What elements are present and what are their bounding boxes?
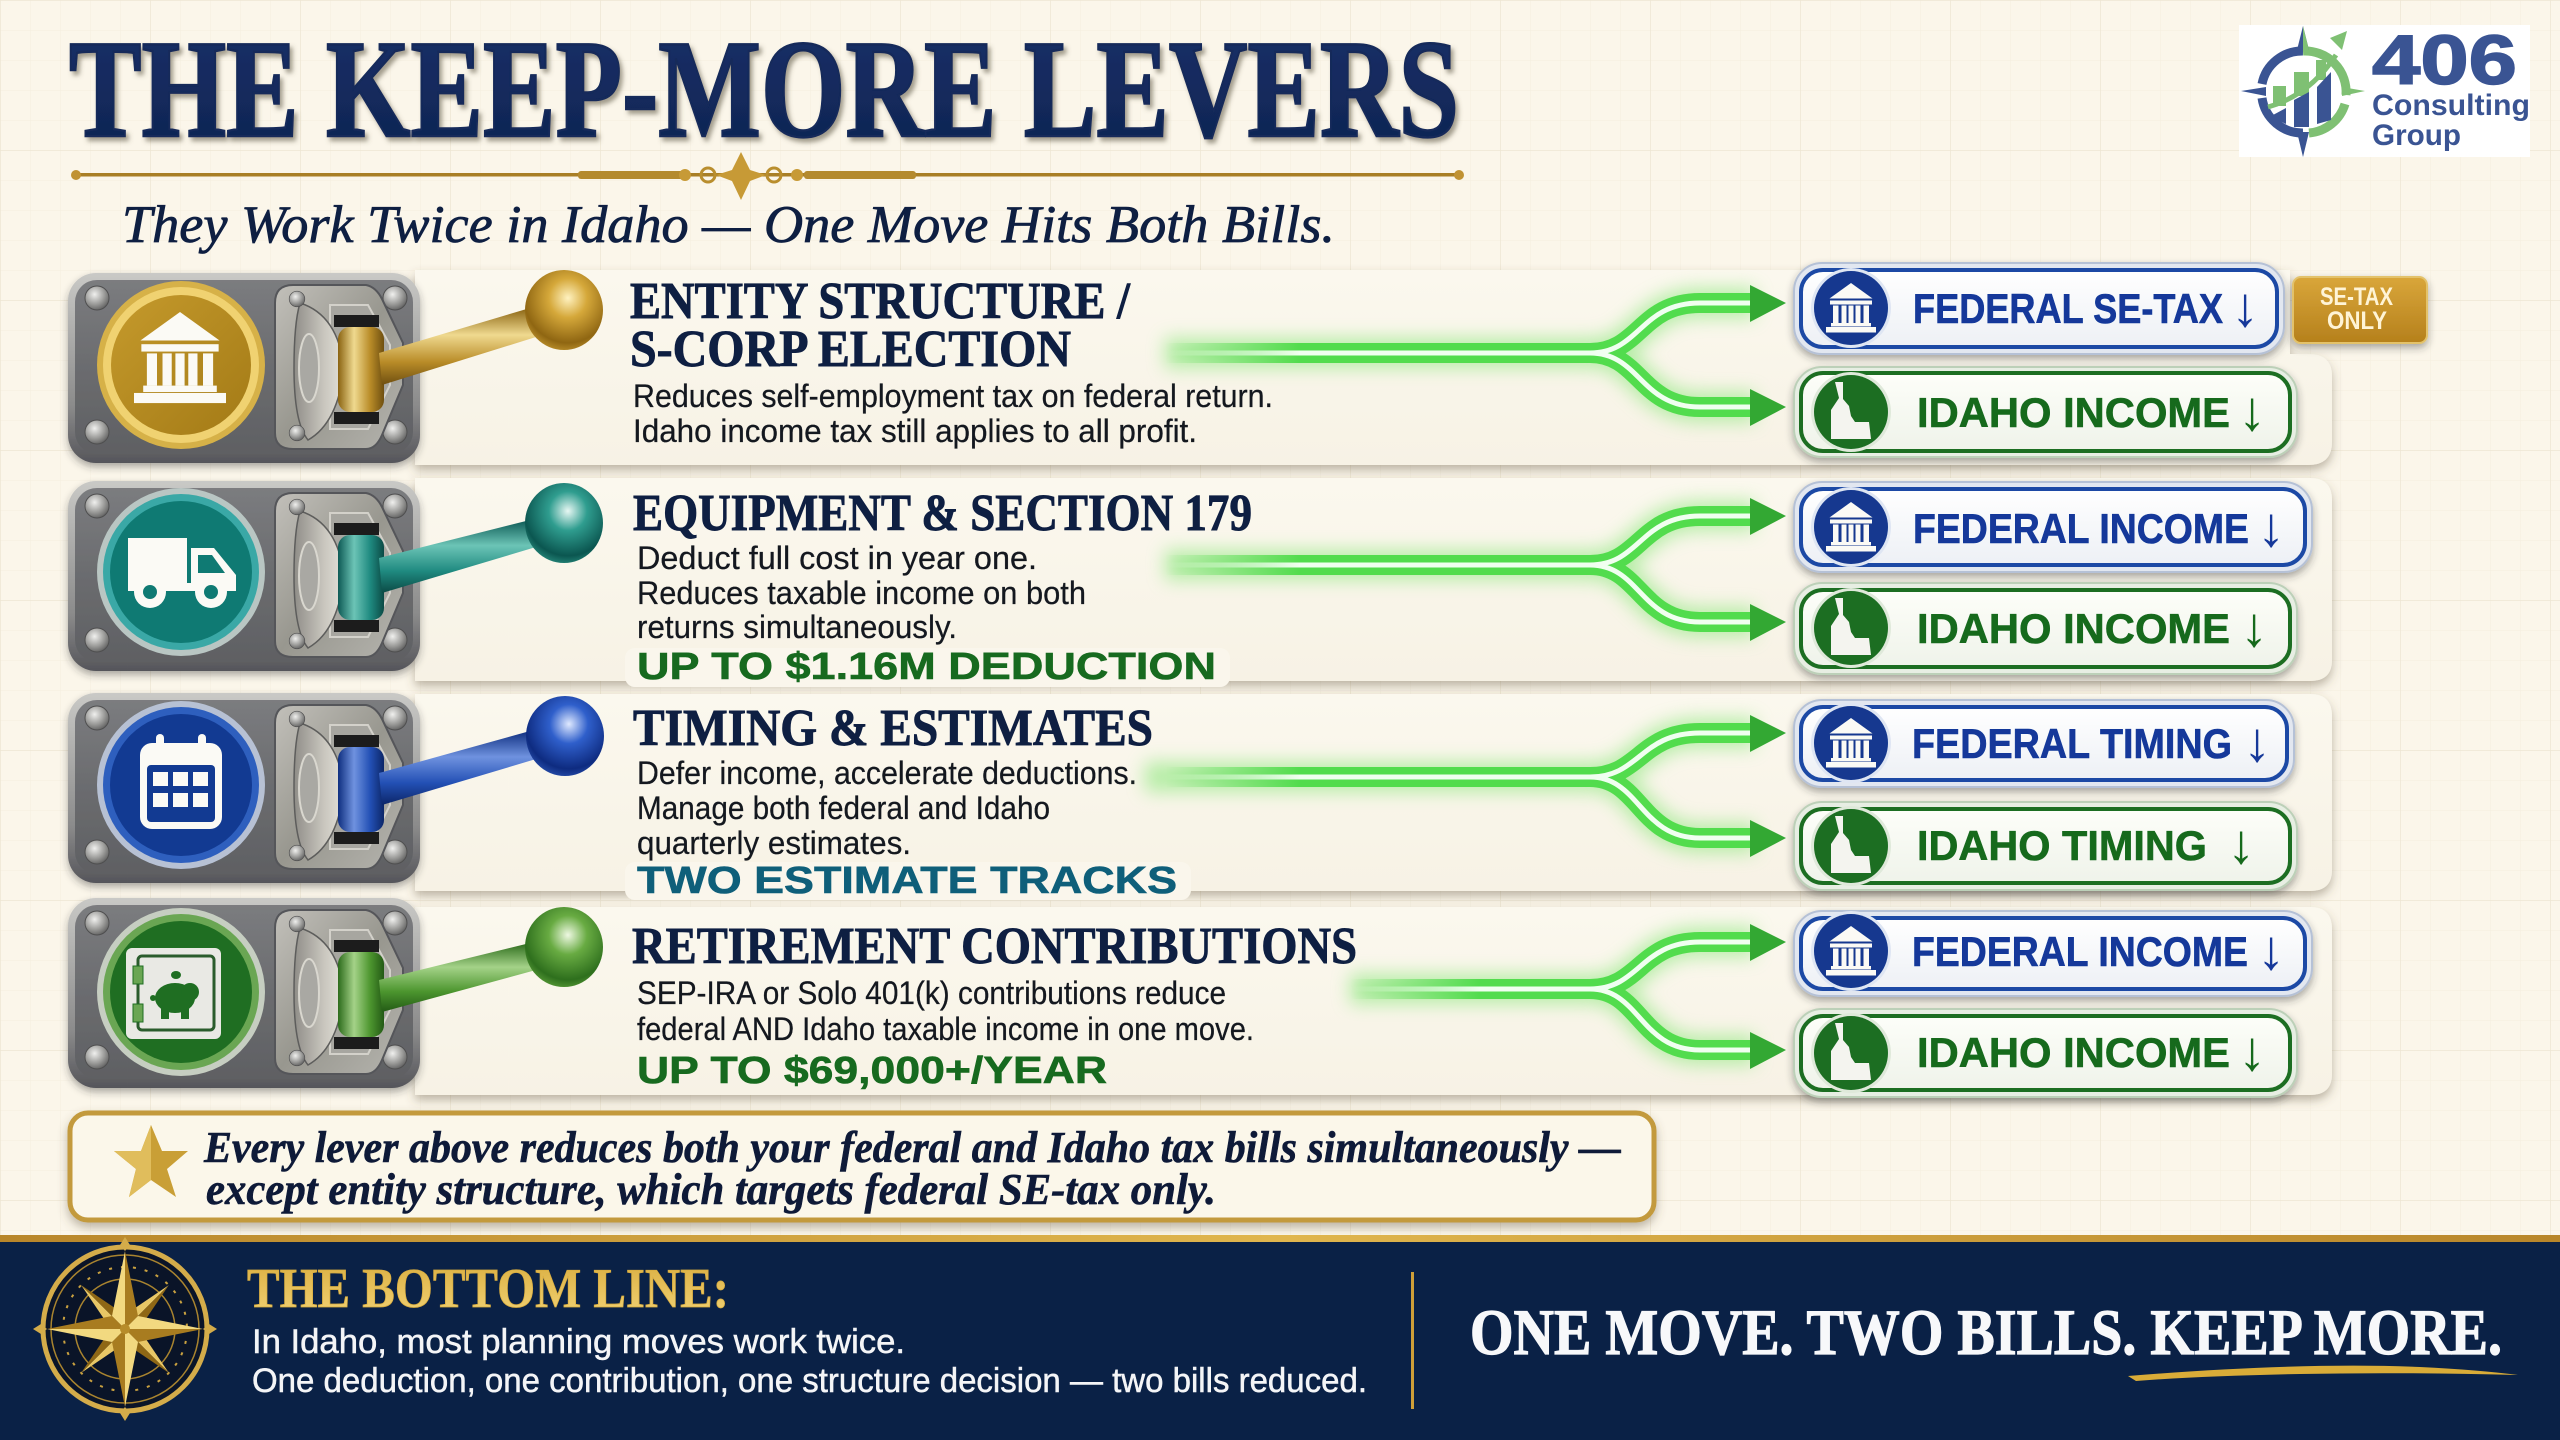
highlight: estimate tracks: TWO ESTIMATE TRACKS <box>637 860 1177 902</box>
bottom line text: One deduction, one contribution, one structure decision — two bills reduced. <box>252 1362 1367 1400</box>
title: THE KEEP-MORE LEVERS <box>69 12 1459 167</box>
bottom line text <box>252 1323 1367 1400</box>
logo: 406 Consulting Group: 406 <box>2372 21 2517 99</box>
icon: gold compass <box>33 1237 217 1421</box>
chip: Idaho income <box>1794 1009 2297 1097</box>
green split arrow <box>1165 498 1786 641</box>
chip: federal timing: FEDERAL TIMING <box>1912 720 2232 767</box>
heading: EQUIPMENT & SECTION 179 <box>633 485 1252 542</box>
chip: federal timing: ↓ <box>2243 710 2271 773</box>
gold underline swoosh <box>2128 1366 2518 1381</box>
description: Deduct full cost in year one. <box>637 540 1037 576</box>
green split arrow <box>1350 924 1786 1069</box>
description <box>637 540 1086 645</box>
panel: equipment and section 179 lever <box>68 478 2332 688</box>
logo: 406 Consulting Group <box>2239 21 2530 157</box>
badge: SE-tax only <box>2293 277 2427 343</box>
badge: SE-tax only: SE-TAX <box>2320 283 2393 311</box>
bottom line heading: THE BOTTOM LINE: <box>247 1258 729 1320</box>
chip: Idaho income <box>1794 583 2297 674</box>
chip: federal income: ↓ <box>2257 495 2285 558</box>
logo: 406 Consulting Group: Consulting <box>2372 89 2530 122</box>
chip: federal income: FEDERAL INCOME <box>1913 505 2249 552</box>
highlight: contribution limit: UP TO $69,000+/YEAR <box>637 1050 1107 1092</box>
chip: Idaho income <box>1794 367 2297 457</box>
row background <box>415 478 2332 681</box>
chip: federal SE-tax: ↓ <box>2231 275 2259 338</box>
row background <box>415 694 2332 891</box>
bottom line text: In Idaho, most planning moves work twice. <box>252 1323 905 1361</box>
heading: RETIREMENT CONTRIBUTIONS <box>632 918 1357 975</box>
chip: federal SE-tax: FEDERAL SE-TAX <box>1913 285 2223 332</box>
heading: ENTITY STRUCTURE / <box>630 273 1130 330</box>
green split arrow <box>1165 285 1786 426</box>
icon: gold star <box>114 1125 188 1197</box>
lever plate: gold <box>68 270 603 463</box>
description <box>637 975 1254 1047</box>
chip: Idaho timing <box>1794 802 2297 890</box>
description: Manage both federal and Idaho <box>637 790 1050 826</box>
row background <box>415 270 2332 465</box>
highlight: deduction limit: UP TO $1.16M DEDUCTION <box>637 646 1216 688</box>
description: SEP-IRA or Solo 401(k) contributions reduce <box>637 975 1226 1011</box>
green split arrow <box>1145 715 1786 857</box>
lever plate: green <box>68 898 603 1088</box>
chip: Idaho income: ↓ <box>2240 595 2268 658</box>
row background <box>415 907 2332 1095</box>
lever plate: teal <box>68 481 603 671</box>
lever plate: blue <box>68 693 604 883</box>
description: quarterly estimates. <box>637 825 911 861</box>
chip: federal SE-tax <box>1794 263 2284 354</box>
description: Reduces self-employment tax on federal return. <box>633 378 1273 414</box>
chip: Idaho timing: IDAHO TIMING <box>1917 822 2207 869</box>
subtitle: They Work Twice in Idaho — One Move Hits Both Bills. <box>122 196 1335 254</box>
footer band <box>0 1235 2560 1440</box>
panel: retirement contributions lever <box>68 898 2332 1097</box>
chip: federal income: ↓ <box>2257 918 2285 981</box>
chip: Idaho income: IDAHO INCOME <box>1917 1029 2230 1076</box>
chip: Idaho timing: ↓ <box>2227 812 2255 875</box>
callout: every lever note <box>70 1113 1654 1220</box>
description: Reduces taxable income on both <box>637 575 1086 611</box>
chip: Idaho income: IDAHO INCOME <box>1917 389 2230 436</box>
chip: federal income <box>1794 911 2312 996</box>
description <box>633 378 1273 449</box>
logo: 406 Consulting Group: Group <box>2372 119 2461 152</box>
description: Defer income, accelerate deductions. <box>637 755 1137 791</box>
callout text: except entity structure, which targets federal SE-tax only. <box>206 1165 1216 1214</box>
chip: Idaho income: IDAHO INCOME <box>1917 605 2230 652</box>
description: Idaho income tax still applies to all profit. <box>633 413 1197 449</box>
description <box>637 755 1137 861</box>
title ornament divider <box>71 152 1464 200</box>
panel: entity structure lever <box>68 263 2427 465</box>
heading line two: S-CORP ELECTION <box>630 321 1071 378</box>
callout text <box>203 1123 1621 1214</box>
chip: Idaho income: ↓ <box>2238 379 2266 442</box>
description: returns simultaneously. <box>637 609 957 645</box>
chip: federal income <box>1794 482 2312 572</box>
callout text: Every lever above reduces both your federal and Idaho tax bills simultaneously — <box>203 1123 1621 1172</box>
panel: timing and estimates lever <box>68 693 2332 902</box>
description: federal AND Idaho taxable income in one move. <box>637 1011 1254 1047</box>
chip: federal income: FEDERAL INCOME <box>1912 928 2248 975</box>
chip: Idaho income: ↓ <box>2238 1019 2266 1082</box>
heading: TIMING & ESTIMATES <box>633 700 1153 757</box>
badge: SE-tax only: ONLY <box>2327 307 2387 335</box>
chip: federal timing <box>1794 700 2294 787</box>
